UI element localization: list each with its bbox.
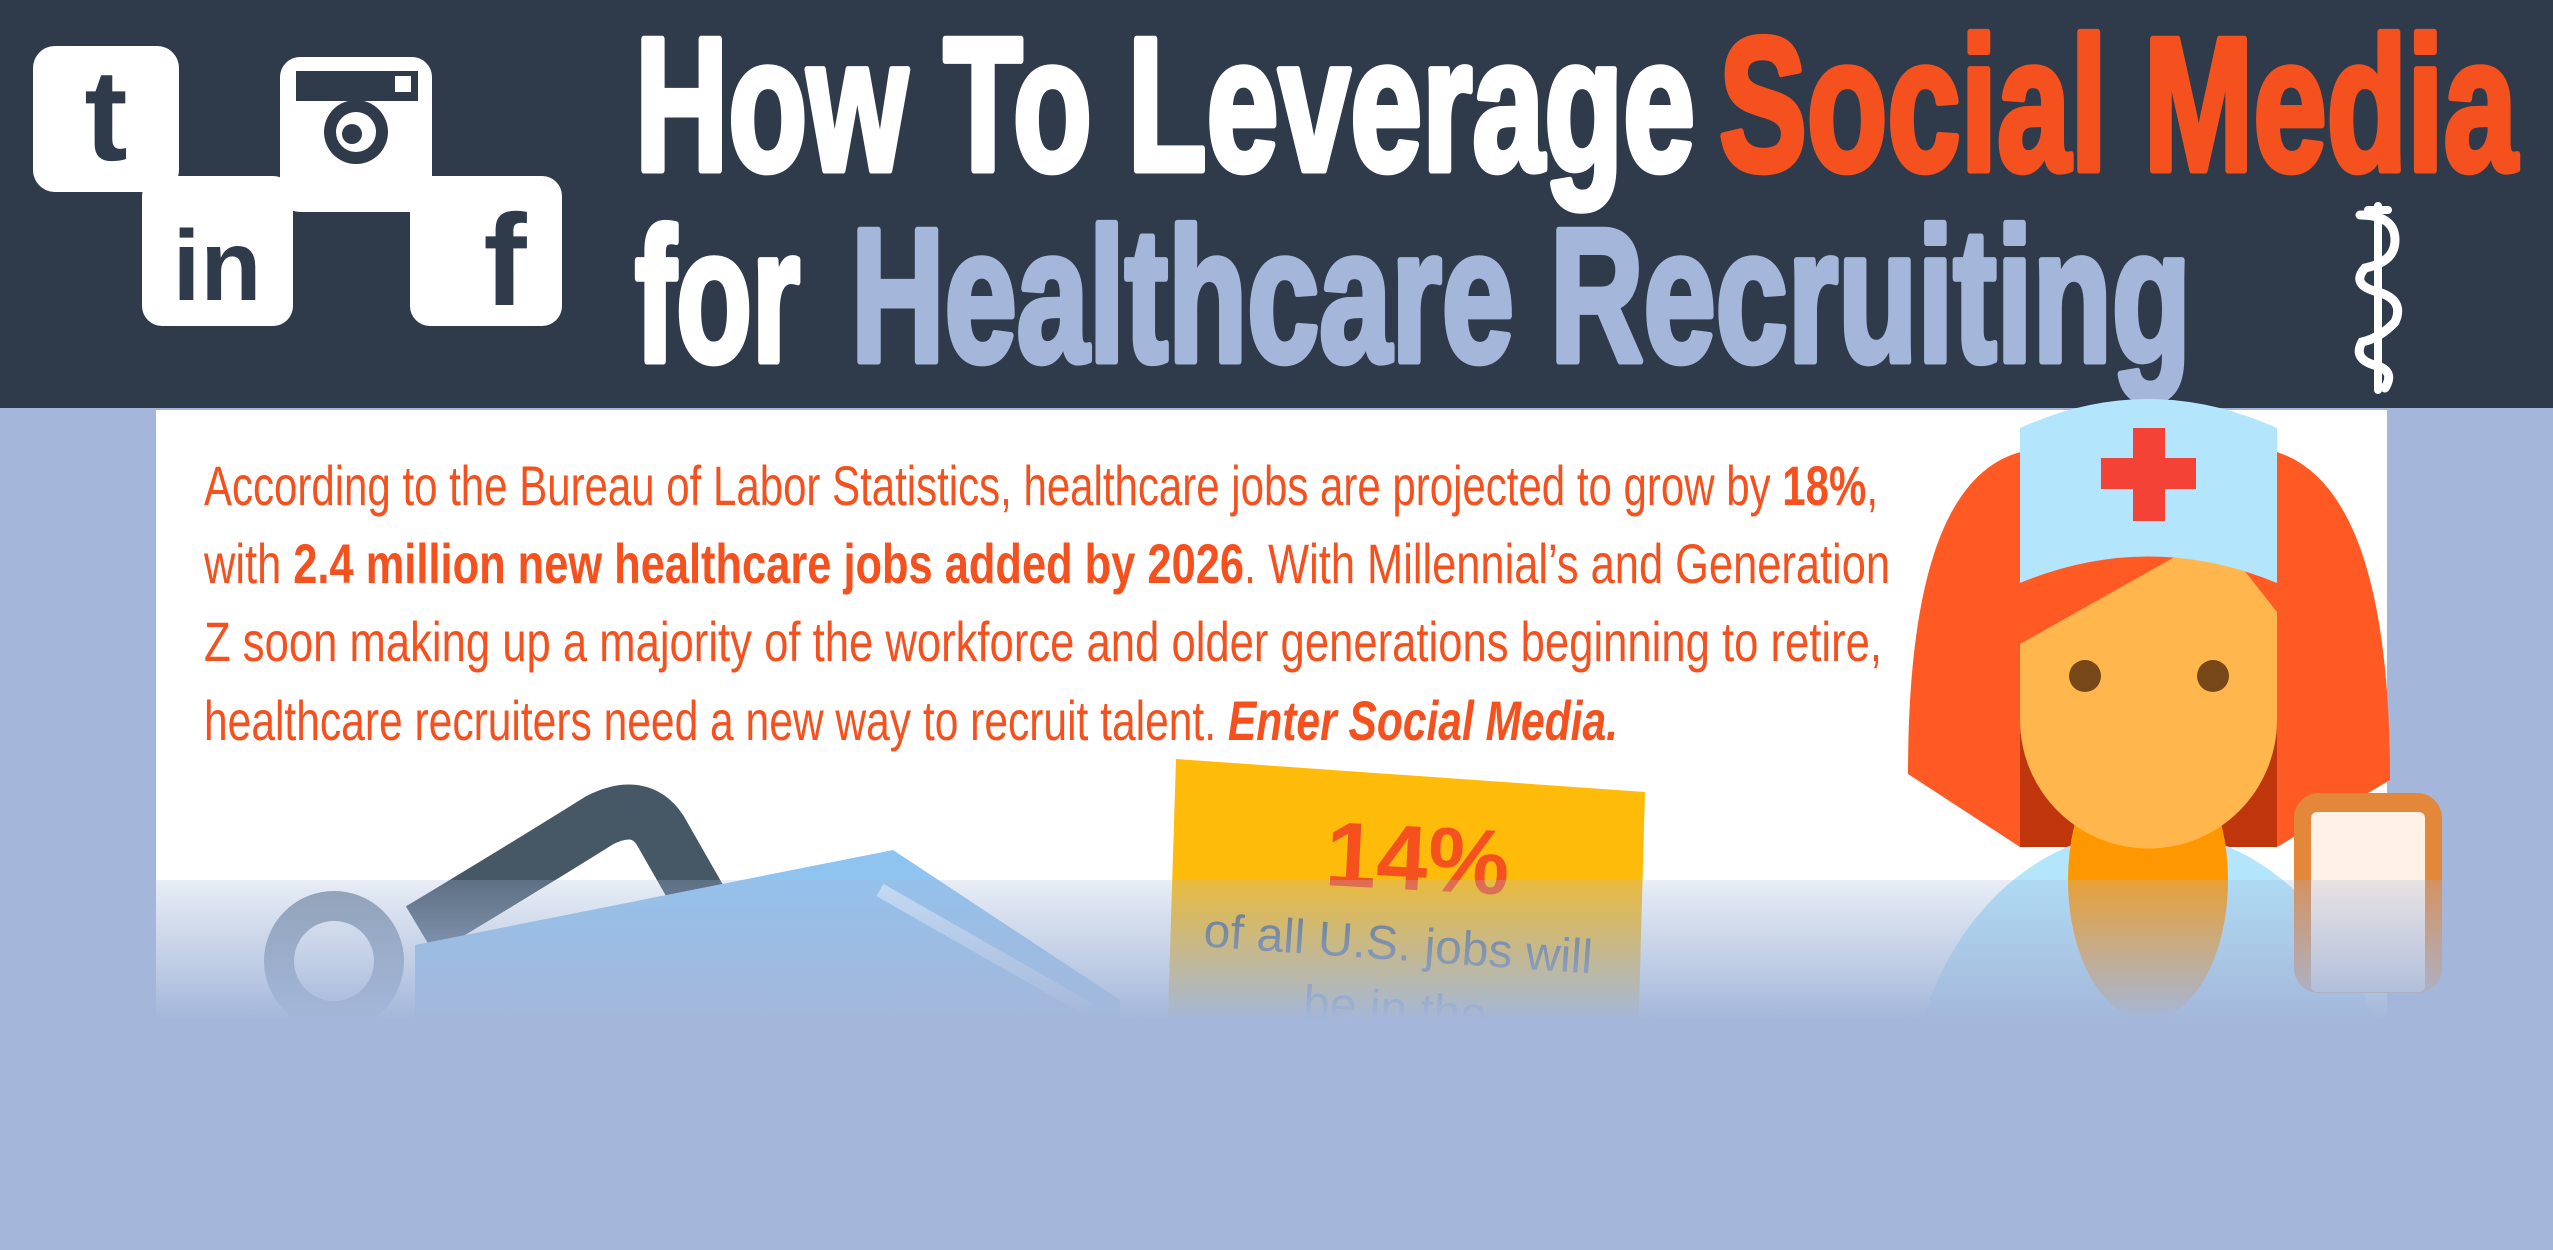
white content panel xyxy=(156,410,2387,1250)
header band xyxy=(0,0,2553,408)
intro paragraph: Z soon making up a majority of the workforce and older generations beginning to retire, xyxy=(204,610,1882,673)
icon: linkedin: in xyxy=(173,210,261,322)
stat card: 14%: 14% xyxy=(1323,803,1512,915)
icon: instagram xyxy=(280,57,432,212)
intro paragraph xyxy=(203,454,1890,752)
intro paragraph: with 2.4 million new healthcare jobs added by 2026. With Millennial’s and Generation xyxy=(203,532,1890,595)
title: How To Leverage xyxy=(635,0,1695,211)
stat card: 14%: of all U.S. jobs will xyxy=(1202,904,1594,985)
icon: caduceus xyxy=(2359,206,2398,390)
intro paragraph: According to the Bureau of Labor Statistics, healthcare jobs are projected to grow by 18%, xyxy=(204,454,1878,517)
illustration: stethoscope and envelope xyxy=(279,812,1120,1050)
title xyxy=(635,0,2518,402)
icon: facebook: f xyxy=(483,187,527,333)
icon: facebook xyxy=(410,176,562,333)
illustration: nurse xyxy=(1908,399,2442,1250)
icon: tumblr: t xyxy=(84,42,128,188)
intro paragraph: healthcare recruiters need a new way to recruit talent. Enter Social Media. xyxy=(204,689,1618,752)
icon group: social media xyxy=(33,42,562,333)
stat card: 14% xyxy=(1166,759,1645,1080)
stat card: 14%: be in the xyxy=(1301,976,1489,1042)
icon: linkedin xyxy=(142,176,293,326)
icon: tumblr xyxy=(33,42,179,192)
title: for xyxy=(635,190,800,402)
